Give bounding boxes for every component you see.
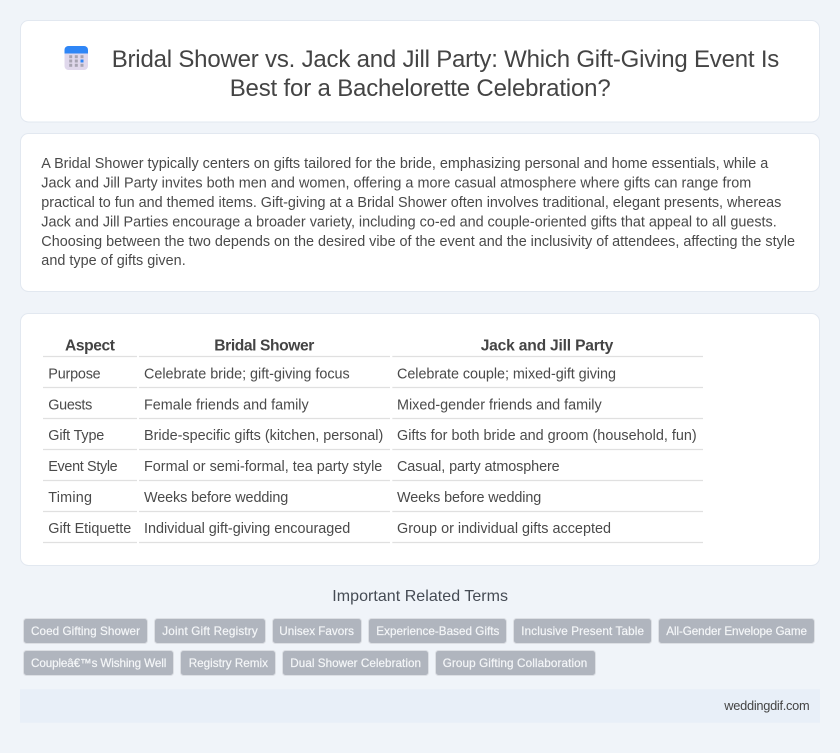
table row: timing: Weeks before wedding — [144, 490, 288, 506]
footer source text: weddingdif.com — [723, 698, 810, 713]
tag — [514, 618, 652, 644]
tag — [24, 618, 148, 644]
tag — [436, 650, 596, 676]
table row: gift etiquette: Gift Etiquette — [48, 521, 131, 537]
footer bar — [20, 689, 820, 723]
table row: event style: Formal or semi-formal, tea party style — [144, 459, 382, 475]
text block: summary paragraph: Choosing between the two depends on the desired vibe of the event and the inclusivity of attendees, affecting the style — [41, 234, 795, 250]
tag — [282, 650, 428, 676]
tag: Experience-Based Gifts — [376, 625, 499, 638]
tag — [272, 618, 362, 644]
tag — [180, 650, 276, 676]
panel: comparison table — [20, 314, 820, 566]
table row: event style: Event Style — [48, 459, 118, 475]
table row: guests: Guests — [48, 397, 92, 413]
tag: Coupleâ€™s Wishing Well — [31, 657, 166, 670]
tag — [154, 618, 266, 644]
tag — [368, 618, 506, 644]
tag: Coed Gifting Shower — [31, 625, 140, 638]
tag: Group Gifting Collaboration — [443, 657, 587, 670]
panel: header — [20, 20, 820, 122]
related terms tags — [24, 618, 814, 676]
table row: gift etiquette: Group or individual gifts accepted — [397, 521, 611, 537]
table row: gift type: Gift Type — [48, 428, 104, 444]
tag: Joint Gift Registry — [162, 625, 258, 638]
table row: gift etiquette: Individual gift-giving encouraged — [144, 521, 350, 537]
tag: Registry Remix — [189, 657, 268, 670]
title: Best for a Bachelorette Celebration? — [230, 75, 611, 102]
table row: purpose: Celebrate bride; gift-giving focus — [144, 366, 350, 382]
table row: gift type — [43, 428, 703, 450]
text block: summary paragraph: practical to fun and themed items. Gift-giving at a Bridal Shower often involves traditional, elegant presents, whereas — [41, 195, 781, 211]
table row: gift type: Gifts for both bride and groom (household, fun) — [397, 428, 697, 444]
table row: gift type: Bride-specific gifts (kitchen, personal) — [144, 428, 383, 444]
text block: summary paragraph: Jack and Jill Party invites both men and women, offering a more casual atmosphere where gifts can range from — [41, 176, 751, 192]
table header row: Jack and Jill Party — [481, 338, 614, 355]
table row: guests: Mixed-gender friends and family — [397, 397, 602, 413]
text block: summary paragraph: Jack and Jill Parties encourage a broader variety, including co-ed and couple-oriented gifts that appeal to all guests. — [41, 214, 777, 230]
table row: purpose: Celebrate couple; mixed-gift giving — [397, 366, 616, 382]
table header row — [43, 338, 703, 356]
tag: Unisex Favors — [279, 625, 354, 638]
heading: important related terms: Important Related Terms — [332, 588, 508, 605]
tag — [658, 618, 814, 644]
table row: event style: Casual, party atmosphere — [397, 459, 560, 475]
table header row: Aspect — [65, 338, 115, 355]
table row: purpose — [43, 366, 703, 388]
tag: Inclusive Present Table — [521, 625, 644, 638]
table row: guests: Female friends and family — [144, 397, 309, 413]
title — [112, 46, 779, 102]
tag: Dual Shower Celebration — [290, 657, 421, 670]
panel: summary — [20, 134, 820, 292]
table header row: Bridal Shower — [214, 338, 314, 355]
title: Bridal Shower vs. Jack and Jill Party: Which Gift-Giving Event Is — [112, 46, 779, 73]
table row: event style — [43, 459, 703, 480]
tag: All-Gender Envelope Game — [666, 625, 807, 638]
table row: guests — [43, 397, 703, 418]
text block: summary paragraph — [41, 156, 795, 269]
table row: timing: Timing — [48, 490, 92, 506]
table row: purpose: Purpose — [48, 366, 101, 382]
text block: summary paragraph: and type of gifts given. — [41, 253, 186, 269]
table row: gift etiquette — [43, 521, 703, 542]
table row: timing — [43, 490, 703, 512]
tag — [24, 650, 174, 676]
text block: summary paragraph: A Bridal Shower typically centers on gifts tailored for the bride, emphasizing personal and home essentials, while a — [41, 156, 768, 172]
table row: timing: Weeks before wedding — [397, 490, 541, 506]
icon: calendar — [64, 46, 88, 70]
